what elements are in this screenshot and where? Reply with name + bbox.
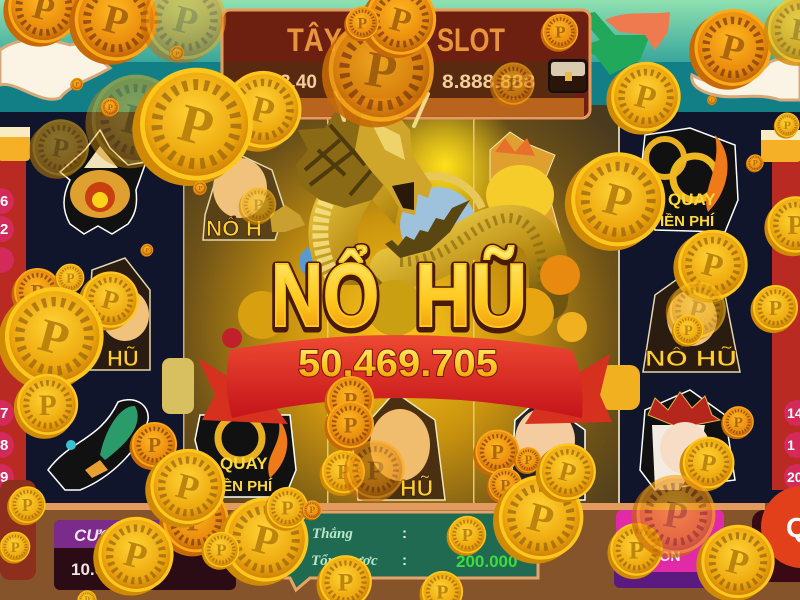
symbol: Buddha Nổ Hũ left middle <box>85 258 150 371</box>
NỔ HŨ headline <box>271 244 527 348</box>
symbol: woman with lotus crown top right of centre <box>486 132 560 235</box>
plaque title: SLOT <box>437 22 505 58</box>
symbol: Nổ Hũ right middle: NỔ HŨ <box>645 346 737 371</box>
total bet value: 200.000 <box>456 552 517 571</box>
NỔ HŨ headline: HŨ <box>415 247 527 348</box>
dragon mane <box>296 105 402 208</box>
symbol: Quay free spin left: QUAY <box>220 454 268 473</box>
number balls: 2 <box>0 221 8 238</box>
number balls: 8 <box>0 437 8 454</box>
symbol: woman bottom right <box>512 398 585 500</box>
symbol: Quay free spin left: IỀN PHÍ <box>218 478 273 495</box>
icon: teapot symbol <box>60 130 146 234</box>
number balls <box>784 400 800 490</box>
number balls: 6 <box>0 193 8 210</box>
symbol: Quay free spin right: QUAY <box>668 190 716 209</box>
round red button <box>752 486 800 582</box>
symbol: Nổ Hũ right middle <box>643 270 740 372</box>
dragon horns <box>335 93 428 126</box>
icon: feather dragon symbol <box>48 400 148 490</box>
winnings panel: : <box>402 552 407 569</box>
winnings panel: Tổng cược <box>311 553 378 569</box>
symbol: Buddha Nổ Hũ left upper <box>203 155 285 241</box>
left pillar <box>0 127 30 490</box>
dragon claw <box>270 205 305 232</box>
symbol: queen <box>640 390 735 490</box>
NỔ HŨ headline: NỔ <box>271 246 379 348</box>
plaque title: TÂY <box>287 22 342 58</box>
jackpot amount: 50.469.705 <box>298 343 498 385</box>
icon: treasure chest <box>549 60 587 92</box>
symbol: Buddha Nổ Hũ left middle: HŨ <box>107 346 139 371</box>
number balls: 9 <box>0 469 8 486</box>
plaque numbers: 3.40 <box>280 72 317 93</box>
plaque numbers <box>280 72 535 93</box>
body scales <box>320 195 335 280</box>
plaque title <box>287 22 505 58</box>
bet values: 10.000 20 <box>71 560 166 579</box>
symbol: Buddha bottom centre <box>352 392 445 501</box>
number balls <box>0 188 14 490</box>
bet panel <box>54 520 236 590</box>
dragon tail <box>390 225 549 300</box>
dragon <box>270 93 549 300</box>
right pillar <box>761 130 800 490</box>
spin button: ON <box>660 548 680 564</box>
symbol: Buddha bottom centre: HŨ <box>400 474 433 501</box>
tail spines <box>385 200 470 258</box>
coin pile behind banner <box>162 255 640 414</box>
winnings labels: Thắng <box>312 526 353 542</box>
symbol: Buddha Nổ Hũ left upper: NỔ H <box>206 216 262 241</box>
number balls: 1 <box>787 437 795 453</box>
left cloud <box>0 40 110 99</box>
tail scales <box>400 218 543 295</box>
symbol: Quay free spin right: IỀN PHÍ <box>660 213 715 230</box>
plaque numbers: 8.888.888 <box>442 72 535 93</box>
NỔ HŨ headline: HŨ <box>415 245 527 346</box>
red ribbon banner <box>198 335 612 424</box>
winnings panel: : <box>402 525 407 542</box>
bet label: CƯỢC <box>74 526 127 545</box>
number balls: 7 <box>0 405 8 422</box>
NỔ HŨ headline: NỔ <box>271 244 379 346</box>
blue orb behind dragon <box>299 176 482 278</box>
spin button <box>614 510 724 588</box>
dragon body <box>308 170 402 285</box>
green dragon ornament <box>575 12 670 75</box>
symbol: Quay free spin right <box>640 128 738 232</box>
symbol: Quay free spin left <box>195 415 296 497</box>
right cloud <box>692 58 800 100</box>
top title plaque <box>222 10 590 118</box>
dragon head <box>355 108 432 215</box>
bottom control panel <box>0 480 800 600</box>
winnings panel <box>285 512 538 590</box>
